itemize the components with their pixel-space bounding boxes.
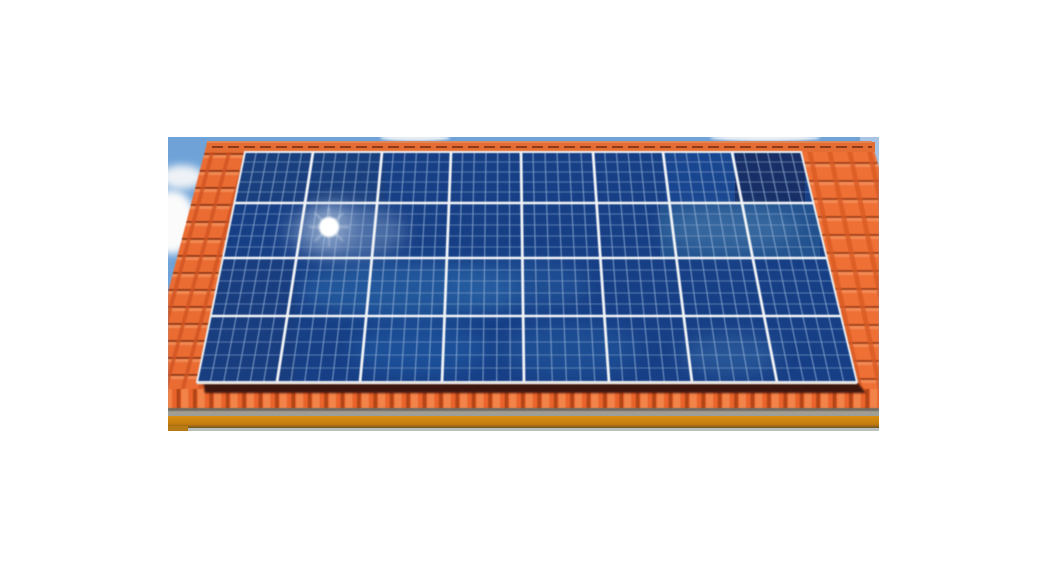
cell grid: horizontal lines (190, 162, 860, 368)
panel base colour (190, 150, 860, 384)
roof: lower tile band (168, 389, 879, 409)
module frames: outer edge and vertical rails (197, 152, 857, 383)
roof: right tiles (801, 151, 879, 408)
roof: top ridge tiles (207, 141, 875, 152)
module frames: horizontal rails (190, 203, 860, 316)
reflection shading (279, 152, 820, 378)
roof: left tiles (168, 142, 245, 408)
photo: solar panels on an orange tiled roof (168, 137, 879, 431)
cell grid: vertical lines (210, 152, 844, 382)
solar panel array (190, 150, 860, 384)
wooden fascia (168, 416, 879, 428)
sun glare (305, 203, 353, 251)
gutter (168, 408, 879, 416)
sky and clouds (148, 135, 879, 431)
photo contents (148, 135, 879, 431)
below the eave (168, 426, 879, 431)
panel shadow (203, 382, 866, 393)
